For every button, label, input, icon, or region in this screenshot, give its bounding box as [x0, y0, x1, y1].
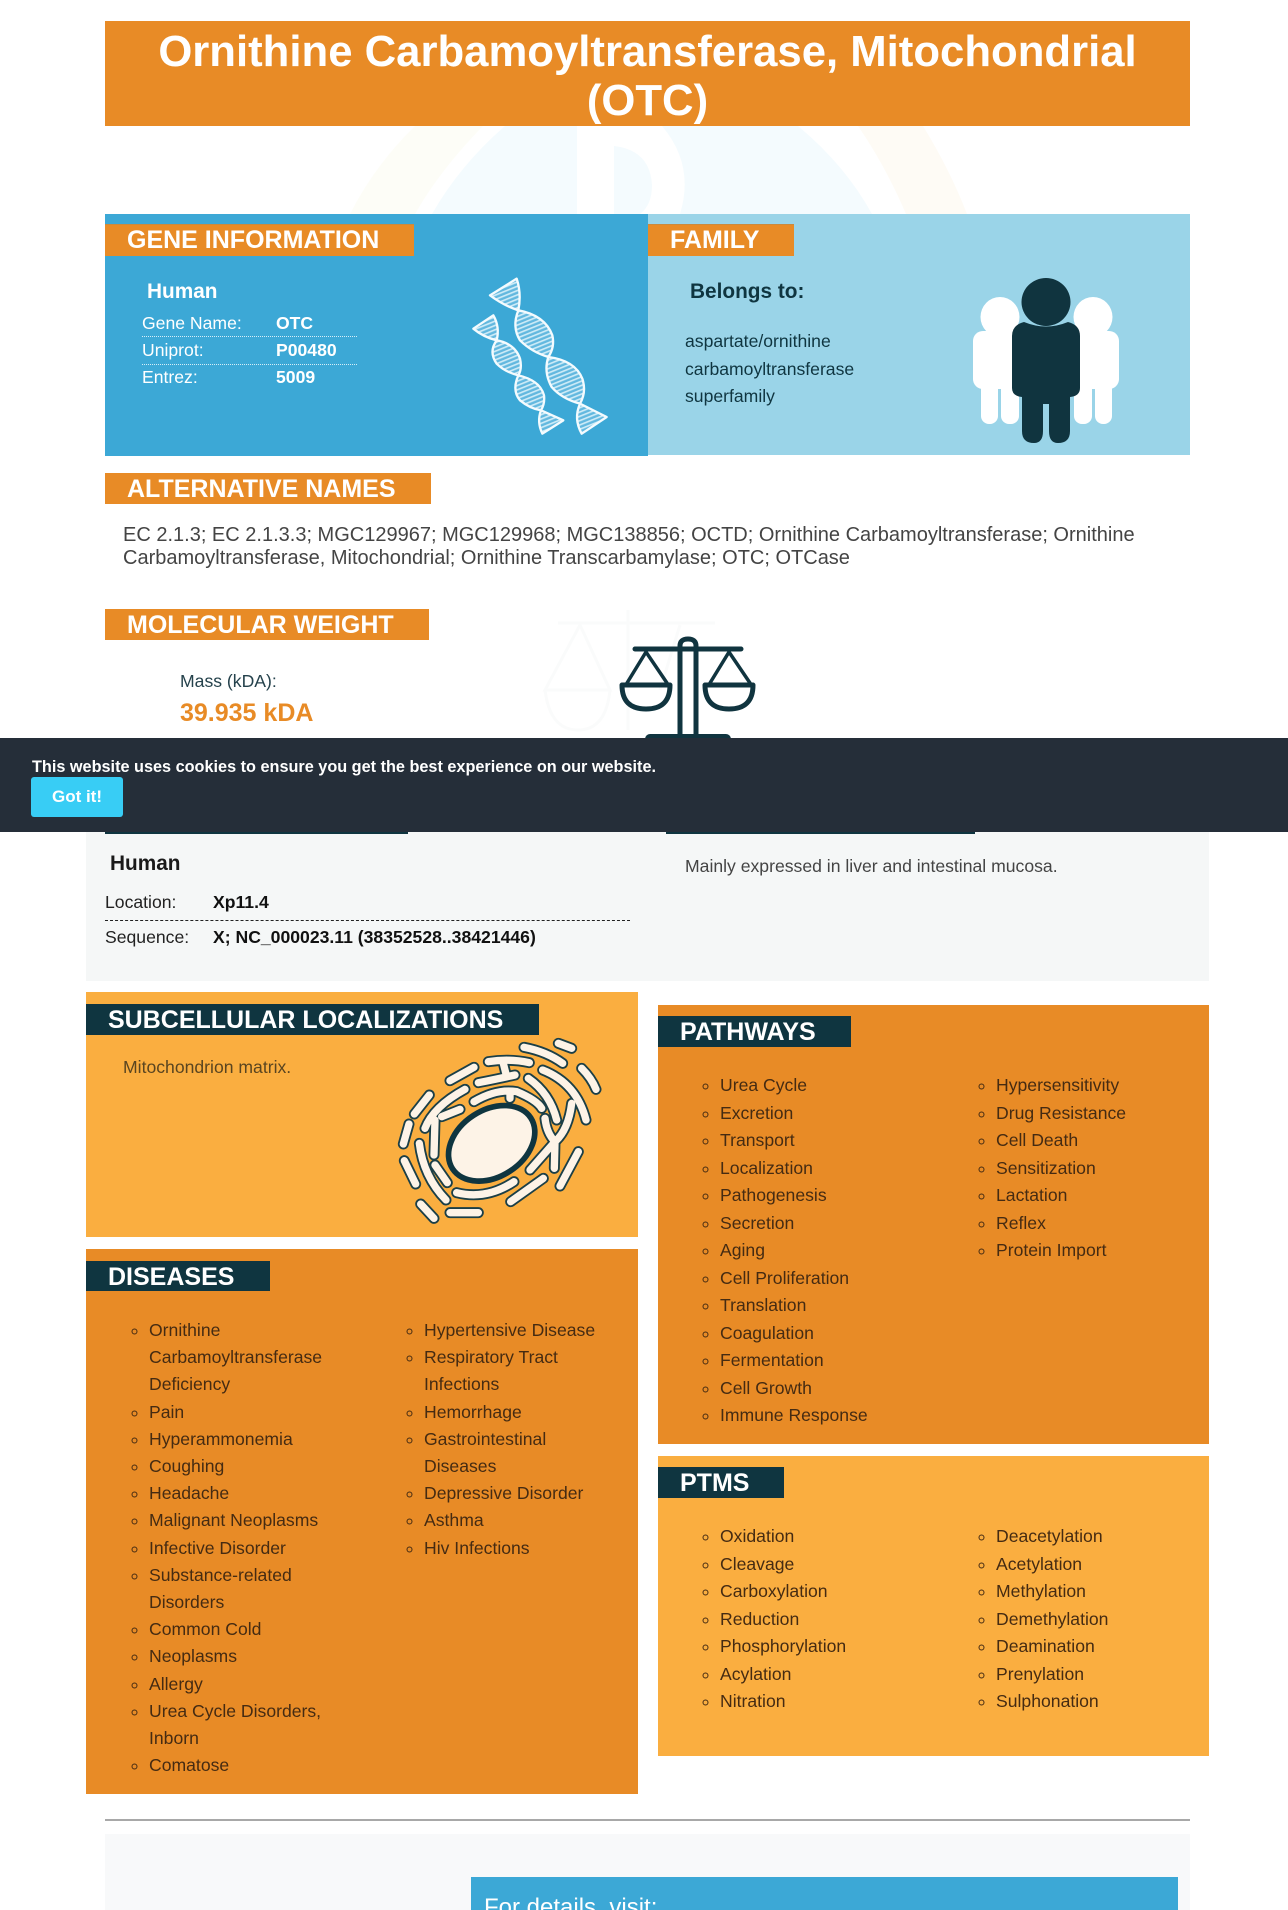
list: PTMs column 1: Nitration: [720, 1691, 786, 1711]
panel: PTMs: [658, 1456, 1209, 1756]
table: location and sequence: Xp11.4: [213, 892, 269, 912]
list: pathways column 1: Urea Cycle: [720, 1075, 807, 1095]
list: pathways column 1: Transport: [720, 1130, 795, 1150]
list: diseases column 1: Headache: [149, 1483, 229, 1503]
list: diseases column 2: Depressive Disorder: [424, 1483, 583, 1503]
panel: family: [648, 214, 1190, 455]
icon: group of people: [973, 278, 1119, 443]
list: diseases column 1: Malignant Neoplasms: [149, 1510, 318, 1530]
list: diseases column 1: Substance-related: [149, 1565, 292, 1585]
list: diseases column 1: Neoplasms: [149, 1646, 237, 1666]
list: diseases column 1: Ornithine: [149, 1320, 220, 1340]
heading: pathways: PATHWAYS: [680, 1018, 816, 1046]
list: pathways column 2: Drug Resistance: [996, 1102, 1126, 1122]
text: family name: [685, 331, 854, 406]
text: localization: Mitochondrion matrix.: [123, 1057, 291, 1077]
text: cookie message: This website uses cookies to ensure you get the best experience on our website.: [32, 758, 656, 776]
table: location and sequence: Sequence:: [105, 927, 189, 947]
list: pathways column 2: Sensitization: [996, 1158, 1096, 1178]
list: pathways column 2: Cell Death: [996, 1130, 1078, 1150]
list: PTMs column 2: [978, 1526, 1108, 1711]
list: diseases column 1: Common Cold: [149, 1619, 261, 1639]
list: pathways column 2: Reflex: [996, 1212, 1046, 1232]
table: gene identifiers: Gene Name:: [142, 313, 242, 333]
heading: alternative names: ALTERNATIVE NAMES: [127, 475, 396, 503]
list: diseases column 1: Carbamoyltransferase: [149, 1347, 322, 1367]
heading: PTMs: [658, 1467, 784, 1498]
list: PTMs column 1: [702, 1526, 846, 1711]
text: species: Human: [110, 852, 180, 875]
icon: mitochondrion: [398, 1038, 602, 1224]
table: location and sequence: X; NC_000023.11 (38352528..38421446): [213, 927, 536, 947]
list: PTMs column 2: Deacetylation: [996, 1526, 1103, 1546]
list: pathways column 2: Hypersensitivity: [996, 1075, 1119, 1095]
title banner: Ornithine Carbamoyltransferase, Mitochondrial: [158, 27, 1137, 76]
list: diseases column 2: [406, 1320, 595, 1558]
text: belongs to: Belongs to:: [690, 280, 804, 303]
list: diseases column 1: Coughing: [149, 1456, 224, 1476]
list: diseases column 1: [132, 1320, 322, 1775]
icon: balance scale: [620, 636, 756, 738]
panel: diseases: [86, 1249, 638, 1794]
heading: family: FAMILY: [670, 226, 759, 254]
list: PTMs column 2: Prenylation: [996, 1664, 1084, 1684]
list: diseases column 2: Hiv Infections: [424, 1538, 530, 1558]
panel: pathways: [658, 1005, 1209, 1444]
text: species: Human: [147, 280, 217, 303]
list: pathways column 1: Translation: [720, 1295, 806, 1315]
list: PTMs column 1: Cleavage: [720, 1554, 794, 1574]
panel: subcellular localizations: [86, 992, 638, 1237]
list: diseases column 1: Urea Cycle Disorders,: [149, 1701, 321, 1721]
table: gene identifiers: OTC: [276, 313, 313, 333]
list: diseases column 1: Disorders: [149, 1592, 224, 1612]
heading tab: hidden by cookie bar, right: [666, 820, 975, 834]
heading: family: [648, 224, 794, 256]
table: location and sequence: [105, 892, 630, 947]
table: gene identifiers: Entrez:: [142, 367, 198, 387]
list: PTMs column 1: Phosphorylation: [720, 1636, 846, 1656]
heading: diseases: DISEASES: [108, 1263, 234, 1291]
list: diseases column 2: Gastrointestinal: [424, 1429, 546, 1449]
list: pathways column 1: Localization: [720, 1158, 813, 1178]
text: family name: aspartate/ornithine: [685, 331, 831, 351]
list: diseases column 1: Pain: [149, 1402, 184, 1422]
list: diseases column 1: Comatose: [149, 1755, 229, 1775]
callout: details link box: [471, 1877, 1178, 1910]
cookie bar: [0, 738, 1288, 832]
heading: PTMs: PTMS: [680, 1469, 749, 1497]
heading: pathways: [658, 1016, 851, 1047]
table: gene identifiers: 5009: [276, 367, 315, 387]
text: alternative names: [123, 524, 1135, 568]
title banner: (OTC): [587, 76, 708, 125]
list: pathways column 1: [702, 1075, 868, 1425]
panel: gene information: [105, 214, 648, 456]
list: PTMs column 1: Carboxylation: [720, 1581, 828, 1601]
table: gene identifiers: Uniprot:: [142, 340, 204, 360]
text: tissue expression: Mainly expressed in liver and intestinal mucosa.: [685, 856, 1058, 876]
list: pathways column 1: Cell Proliferation: [720, 1268, 849, 1288]
heading: subcellular localizations: SUBCELLULAR LOCALIZATIONS: [108, 1006, 503, 1034]
table: gene identifiers: [142, 313, 357, 387]
list: pathways column 1: Secretion: [720, 1212, 794, 1232]
list: diseases column 2: Diseases: [424, 1456, 496, 1476]
button: got it: Got it!: [52, 787, 102, 806]
panel: footer: [105, 1834, 1190, 1910]
list: pathways column 1: Fermentation: [720, 1350, 824, 1370]
heading: molecular weight: MOLECULAR WEIGHT: [127, 611, 394, 639]
list: PTMs column 2: Acetylation: [996, 1554, 1082, 1574]
title banner: [105, 21, 1190, 126]
list: diseases column 2: Infections: [424, 1374, 499, 1394]
list: pathways column 1: Aging: [720, 1240, 765, 1260]
list: diseases column 1: Deficiency: [149, 1374, 230, 1394]
panel: chromosome and tissue: [86, 820, 1209, 981]
list: pathways column 1: Pathogenesis: [720, 1185, 827, 1205]
list: pathways column 1: Immune Response: [720, 1405, 868, 1425]
heading: diseases: [86, 1261, 270, 1291]
icon: DNA helices: [472, 278, 608, 435]
list: diseases column 2: Hemorrhage: [424, 1402, 522, 1422]
list: pathways column 2: Lactation: [996, 1185, 1067, 1205]
list: pathways column 1: Cell Growth: [720, 1378, 812, 1398]
list: diseases column 1: Inborn: [149, 1728, 199, 1748]
text: mass label: Mass (kDA):: [180, 671, 277, 691]
list: PTMs column 1: Acylation: [720, 1664, 791, 1684]
list: diseases column 1: Infective Disorder: [149, 1538, 286, 1558]
text: family name: carbamoyltransferase: [685, 358, 854, 378]
list: PTMs column 1: Oxidation: [720, 1526, 794, 1546]
watermark: faint arch behind page: [432, 126, 966, 214]
text: family name: superfamily: [685, 386, 775, 406]
button: got it: [31, 777, 123, 817]
list: diseases column 2: Respiratory Tract: [424, 1347, 558, 1367]
text: alternative names: EC 2.1.3; EC 2.1.3.3; MGC129967; MGC129968; MGC138856; OCTD; Ornithine Carbamoyltransferase; Ornithine: [123, 524, 1135, 546]
list: pathways column 1: Excretion: [720, 1102, 793, 1122]
list: PTMs column 1: Reduction: [720, 1608, 799, 1628]
list: pathways column 2: Protein Import: [996, 1240, 1106, 1260]
list: PTMs column 2: Demethylation: [996, 1608, 1108, 1628]
heading tab: hidden by cookie bar, left: [105, 820, 408, 834]
text: alternative names: Carbamoyltransferase, Mitochondrial; Ornithine Transcarbamylase; OTC; OTCase: [123, 546, 850, 568]
list: PTMs column 2: Deamination: [996, 1636, 1095, 1656]
list: PTMs column 2: Sulphonation: [996, 1691, 1099, 1711]
text: mass value: 39.935 kDA: [180, 699, 313, 727]
list: diseases column 1: Hyperammonemia: [149, 1429, 293, 1449]
list: pathways column 2: [978, 1075, 1126, 1260]
list: diseases column 1: Allergy: [149, 1674, 203, 1694]
list: PTMs column 2: Methylation: [996, 1581, 1086, 1601]
list: diseases column 2: Hypertensive Disease: [424, 1320, 595, 1340]
list: pathways column 1: Coagulation: [720, 1322, 814, 1342]
heading: gene information: GENE INFORMATION: [127, 226, 379, 254]
list: diseases column 2: Asthma: [424, 1510, 484, 1530]
table: location and sequence: Location:: [105, 892, 176, 912]
table: gene identifiers: P00480: [276, 340, 337, 360]
